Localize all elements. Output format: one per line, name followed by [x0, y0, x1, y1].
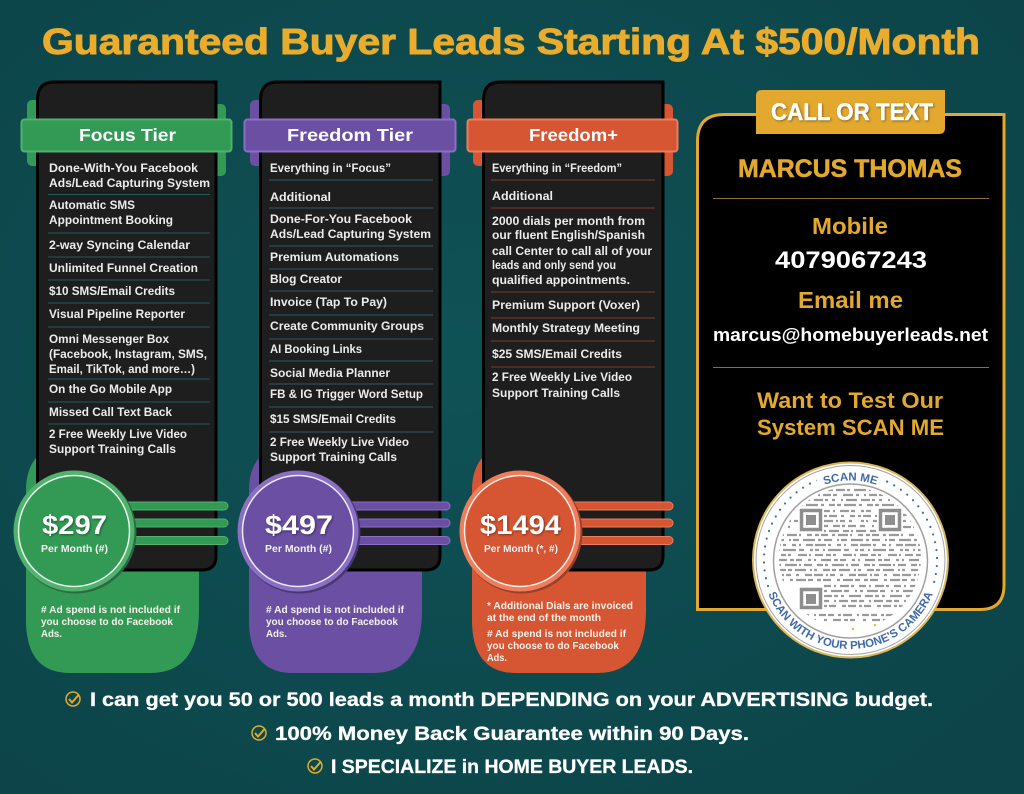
focus feature list: Unlimited Funnel Creation [49, 263, 198, 275]
focus feature list [48, 163, 210, 456]
focus footnote: you choose to do Facebook [41, 617, 174, 628]
freedom side tabs [250, 100, 450, 176]
freedom footnote: # Ad spend is not included if [266, 605, 405, 616]
scan prompt [757, 388, 944, 440]
freedom price badge [238, 470, 360, 594]
freedom plus side tabs [473, 100, 673, 176]
freedom plus feature list: call Center to call all of your [492, 246, 653, 258]
freedom plus card [484, 82, 663, 570]
panel: freedom tier [238, 82, 456, 673]
panel: focus tier [14, 82, 232, 673]
qr code badge [752, 462, 949, 658]
contact name: MARCUS THOMAS [738, 155, 962, 183]
freedom banner [244, 120, 456, 152]
guarantee line 2: 100% Money Back Guarantee within 90 Days. [275, 724, 749, 745]
freedom feature list: FB & IG Trigger Word Setup [270, 389, 423, 401]
freedom feature list: Social Media Planner [270, 368, 391, 380]
focus feature list: Omni Messenger Box [49, 334, 170, 346]
freedom footnote: Ads. [266, 629, 287, 640]
freedom plus feature list [491, 163, 655, 400]
freedom footnote: you choose to do Facebook [266, 617, 399, 628]
focus footnote: Ads. [41, 629, 62, 640]
mobile label: Mobile [812, 213, 888, 239]
panel: contact [696, 90, 1006, 658]
focus stripes [120, 502, 228, 544]
freedom plus price badge: $1494 [480, 510, 561, 540]
focus side tabs [27, 100, 226, 176]
focus price badge: Per Month (#) [41, 544, 108, 555]
scan me curved label: SCAN ME [824, 472, 878, 485]
freedom plus feature list: our fluent English/Spanish [492, 230, 645, 242]
freedom feature list: $15 SMS/Email Credits [270, 414, 396, 426]
focus banner: Focus Tier [79, 125, 176, 145]
focus feature list: 2 Free Weekly Live Video [49, 429, 187, 441]
focus feature list: Done-With-You Facebook [49, 163, 199, 175]
email address: marcus@homebuyerleads.net [713, 325, 988, 345]
guarantee line 1: I can get you 50 or 500 leads a month DEPENDING on your ADVERTISING budget. [90, 690, 933, 711]
call or text tab [756, 90, 945, 134]
freedom price badge: Per Month (#) [265, 544, 332, 555]
qr pattern [779, 488, 921, 622]
blue dot ring [764, 473, 937, 586]
scan with your phone curved label: SCAN WITH YOUR PHONE'S CAMERA [769, 592, 933, 650]
freedom feature list: AI Booking Links [270, 344, 362, 356]
focus feature list: Missed Call Text Back [49, 407, 173, 419]
qr finder centres [806, 515, 895, 604]
freedom plus feature list: qualified appointments. [492, 275, 630, 287]
freedom footnote [266, 605, 405, 640]
freedom feature list: Invoice (Tap To Pay) [270, 297, 387, 309]
focus feature list: Automatic SMS [49, 200, 135, 212]
freedom plus banner [468, 120, 678, 152]
freedom feature list: Create Community Groups [270, 321, 424, 333]
freedom plus feature list: Additional [492, 191, 553, 203]
freedom feature list [269, 163, 433, 464]
email label: Email me [798, 287, 903, 313]
freedom plus price badge [460, 470, 582, 594]
freedom plus footnote: Ads. [487, 653, 507, 664]
freedom plus stripes [565, 502, 673, 544]
guarantee line 3: I SPECIALIZE in HOME BUYER LEADS. [331, 757, 693, 778]
freedom plus feature list: leads and only send you [492, 260, 616, 272]
focus card [38, 82, 216, 570]
freedom feature list: Ads/Lead Capturing System [270, 229, 431, 241]
freedom plus footnote [487, 601, 633, 664]
freedom plus footnote: # Ad spend is not included if [487, 629, 627, 640]
freedom plus footnote: * Additional Dials are invoiced [487, 601, 633, 612]
focus feature list: Ads/Lead Capturing System [49, 178, 210, 190]
freedom feature list: Additional [270, 192, 331, 204]
freedom plus feature list: Monthly Strategy Meeting [492, 323, 640, 335]
freedom stripes [343, 502, 450, 544]
call or text tab: CALL OR TEXT [771, 99, 933, 126]
contact card [698, 114, 1004, 610]
freedom feature list: Premium Automations [270, 252, 399, 264]
focus feature list: Appointment Booking [49, 215, 173, 227]
focus footer shape [26, 458, 199, 673]
freedom price badge: $497 [265, 510, 333, 540]
freedom plus feature list: Everything in “Freedom” [492, 163, 622, 175]
freedom banner: Freedom Tier [287, 125, 413, 145]
focus footnote: # Ad spend is not included if [41, 605, 181, 616]
freedom feature list: Blog Creator [270, 274, 343, 286]
freedom feature list: Everything in “Focus” [270, 163, 391, 175]
freedom plus feature list: 2 Free Weekly Live Video [492, 372, 632, 384]
freedom plus feature list: 2000 dials per month from [492, 216, 645, 228]
focus banner [22, 120, 232, 152]
freedom plus footer shape [472, 458, 646, 673]
focus footnote [41, 605, 181, 640]
freedom feature list: 2 Free Weekly Live Video [270, 437, 409, 449]
freedom plus feature list: $25 SMS/Email Credits [492, 349, 622, 361]
title: Guaranteed Buyer Leads Starting At $500/Month [42, 21, 980, 62]
focus feature list: $10 SMS/Email Credits [49, 286, 175, 298]
focus feature list: On the Go Mobile App [49, 384, 172, 396]
freedom plus footnote: at the end of the month [487, 613, 601, 624]
gold accent dots [852, 624, 876, 630]
freedom card [260, 82, 440, 570]
focus price badge: $297 [42, 510, 107, 540]
freedom feature list: Done-For-You Facebook [270, 214, 413, 226]
scan prompt: System SCAN ME [757, 415, 944, 440]
panel: freedom plus tier [460, 82, 678, 673]
freedom plus feature list: Support Training Calls [492, 388, 620, 400]
focus feature list: Email, TikTok, and more…) [49, 364, 195, 376]
freedom plus footnote: you choose to do Facebook [487, 641, 620, 652]
freedom plus feature list: Premium Support (Voxer) [492, 300, 640, 312]
freedom feature list: Support Training Calls [270, 452, 397, 464]
focus feature list: 2-way Syncing Calendar [49, 240, 191, 252]
scan prompt: Want to Test Our [757, 388, 943, 413]
qr finder squares [802, 510, 900, 608]
phone number: 4079067243 [775, 247, 927, 274]
focus feature list: Visual Pipeline Reporter [49, 309, 186, 321]
focus feature list: (Facebook, Instagram, SMS, [49, 349, 207, 361]
focus price badge [14, 470, 136, 594]
freedom footer shape [249, 458, 422, 673]
freedom plus banner: Freedom+ [529, 125, 618, 145]
focus feature list: Support Training Calls [49, 444, 176, 456]
freedom plus price badge: Per Month (*, #) [484, 544, 558, 555]
